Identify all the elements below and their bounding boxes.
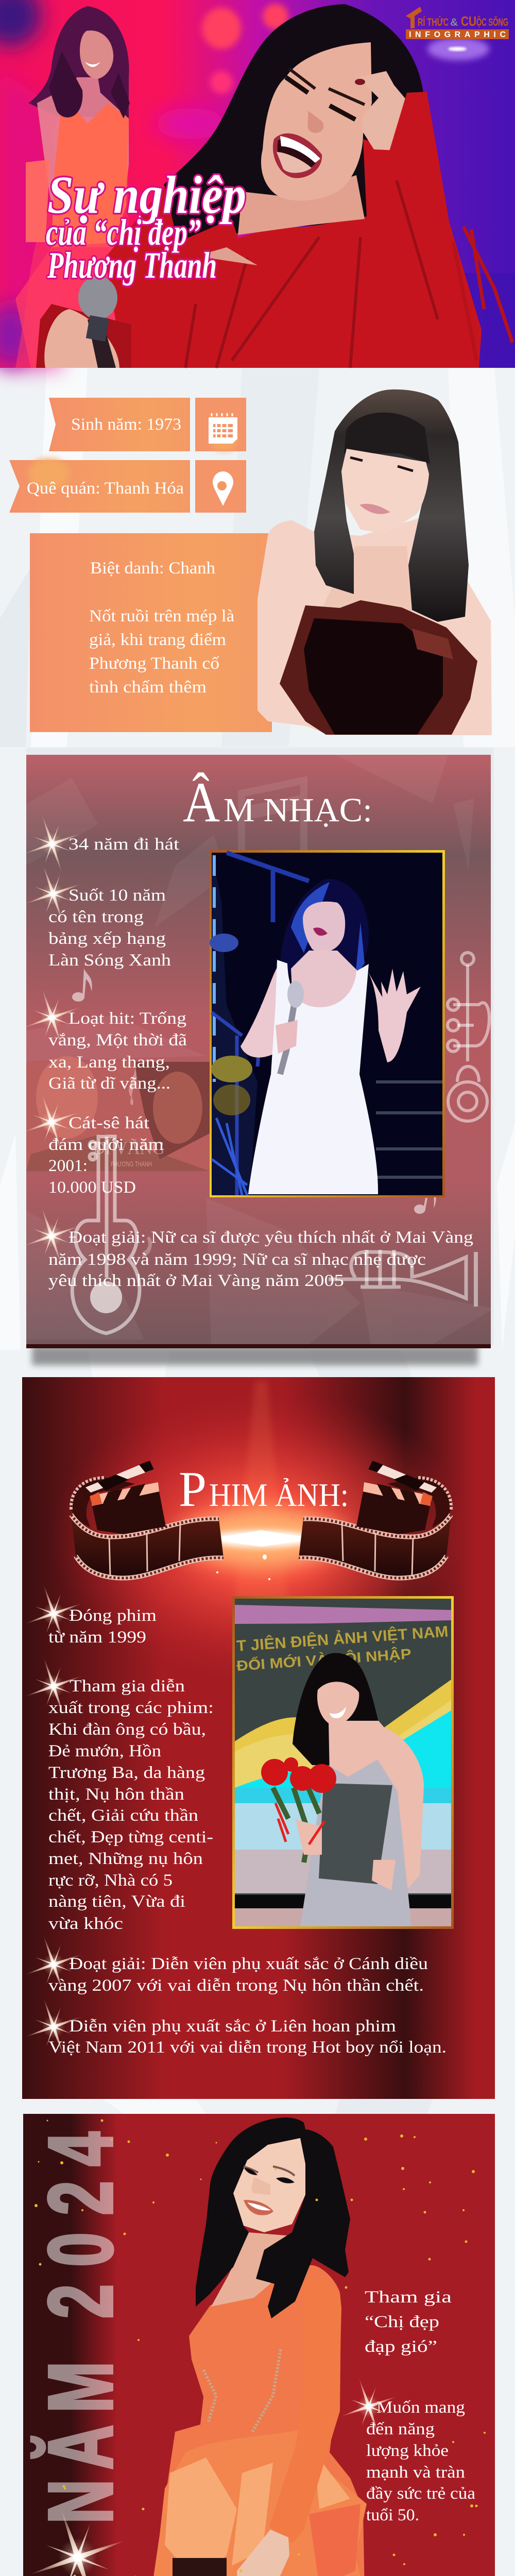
icon: location pin [195, 460, 246, 513]
text: music bullet list: Cát-sê hát [68, 1114, 149, 1132]
panel: music career [23, 748, 494, 1365]
heading: music [183, 771, 372, 834]
icon: sparkle bullets film [25, 1584, 82, 2057]
main figure: singer in red [36, 4, 512, 368]
icon: small music notes [72, 969, 436, 1257]
note panel: nickname and beauty mark: Biệt danh: Chanh [90, 559, 216, 578]
profile portrait [258, 389, 492, 735]
note panel: nickname and beauty mark: Phương Thanh cố [89, 654, 219, 673]
text: Tham gia Chị đẹp đạp gió: đạp gió” [365, 2337, 437, 2356]
album cover overlay [26, 1056, 210, 1171]
text: film bullet list: từ năm 1999 [48, 1628, 146, 1647]
music panel facets [26, 755, 494, 1344]
text: music bullet list: đám cưới năm [48, 1136, 164, 1154]
panel: film career [22, 1377, 495, 2099]
text: film bullet list: met, Những nụ hôn [48, 1850, 203, 1868]
panel: year 2024 [23, 2114, 495, 2576]
text: wish to bring energy: tuổi 50. [366, 2506, 419, 2524]
text: film bullet list: xuất trong các phim: [48, 1699, 214, 1717]
text: wish to bring energy: đến năng [366, 2420, 435, 2438]
text: film bullet list: rực rỡ, Nhà có 5 [48, 1871, 173, 1890]
text: film bullet list: vàng 2007 với vai diễn trong Nụ hôn thần chết. [48, 1976, 424, 1995]
icon: sparkle bullets music [23, 814, 82, 1266]
text: music bullet list: năm 1998 và năm 1999; Nữ ca sĩ nhạc nhẹ được [48, 1250, 426, 1269]
note panel: nickname and beauty mark: giả, khi trang điểm [89, 631, 226, 649]
logo: Tri thuc & Cuoc song infographic [406, 7, 509, 39]
text: music bullet list: Giã từ dĩ vãng... [48, 1074, 170, 1093]
vertical heading: year 2024: NĂM 2024 [30, 2132, 131, 2524]
profile: hometown tag: Quê quán: Thanh Hóa [27, 479, 184, 498]
note panel: nickname and beauty mark: Nốt ruồi trên mép là [89, 607, 234, 625]
title: Sự nghiệp của "chị đẹp" Phương Thanh [46, 165, 246, 286]
text: Tham gia Chị đẹp đạp gió [365, 2288, 452, 2356]
text: wish to bring energy [366, 2398, 475, 2524]
logo: Tri thuc & Cuoc song infographic: INFOGRAPHIC [409, 30, 506, 39]
profile: birth year tag: Sinh năm: 1973 [71, 415, 181, 434]
text: film bullet list: Việt Nam 2011 với vai diễn trong Hot boy nổi loạn. [48, 2038, 447, 2057]
icon: sparkles [29, 2377, 398, 2576]
text: wish to bring energy: đầy sức trẻ của [366, 2484, 475, 2503]
logo: Tri thuc & Cuoc song infographic: & [450, 16, 458, 28]
album cover overlay: DĨ VÃNG [93, 1138, 165, 1158]
singer hand holding microphone [36, 276, 131, 368]
title: Sự nghiệp của "chị đẹp" Phương Thanh: Sự nghiệp [47, 165, 246, 225]
text: Tham gia Chị đẹp đạp gió: Tham gia [365, 2288, 452, 2307]
icon: vertical trumpet [448, 953, 489, 1121]
heading: film: P [179, 1462, 207, 1517]
text: film bullet list: Diễn viên phụ xuất sắc ở Liên hoan phim [69, 2017, 396, 2036]
text: film bullet list [48, 1606, 447, 2057]
heading: music: Â [183, 771, 220, 834]
gold glitter dots [29, 2120, 486, 2576]
text: wish to bring energy: Muốn mang [376, 2398, 465, 2417]
text: music bullet list: có tên trong [48, 908, 144, 926]
photo: actress with flowers: ĐỔI MỚI VÀ HỘI NHẬP [236, 1645, 412, 1674]
text: music bullet list: yêu thích nhất ở Mai Vàng năm 2005 [48, 1272, 344, 1290]
text: music bullet list: vắng, Một thời đã [48, 1031, 187, 1049]
text: Tham gia Chị đẹp đạp gió: “Chị đẹp [365, 2313, 439, 2331]
film reel with clapperboard left [71, 1461, 224, 1578]
note panel: nickname and beauty mark: tình chấm thêm [89, 678, 207, 697]
header banner [0, 0, 515, 368]
film reel with clapperboard right [299, 1461, 451, 1578]
text: music bullet list [48, 835, 473, 1290]
title: Sự nghiệp của "chị đẹp" Phương Thanh: của “chị đẹp” [46, 212, 201, 253]
logo: Tri thuc & Cuoc song infographic: RÍ THỨC [418, 16, 449, 28]
text: film bullet list: Đoạt giải: Diễn viên phụ xuất sắc ở Cánh diều [69, 1955, 428, 1973]
profile: hometown tag [9, 459, 190, 513]
text: film bullet list: chết, Giải cứu thần [48, 1806, 198, 1825]
photo: actress with flowers [232, 1596, 454, 1929]
album cover overlay: PHƯƠNG THANH [111, 1160, 152, 1168]
icon: large music note [242, 781, 304, 850]
photo: singer in white on stage [210, 850, 445, 1197]
ghost figure: woman in orange dress [15, 6, 154, 368]
text: film bullet list: nàng tiên, Vừa đi [48, 1892, 185, 1911]
title: Sự nghiệp của "chị đẹp" Phương Thanh: Phương Thanh [47, 245, 217, 286]
text: film bullet list: chết, Đẹp từng centi- [48, 1828, 213, 1846]
text: film bullet list: Tham gia diễn [70, 1677, 185, 1696]
text: music bullet list: Làn Sóng Xanh [48, 951, 171, 970]
text: wish to bring energy: mạnh và tràn [366, 2463, 465, 2482]
header stage lights [0, 0, 515, 368]
text: film bullet list: thịt, Nụ hôn thần [48, 1785, 184, 1804]
figure: woman in orange dress [151, 2117, 367, 2576]
heading: music: M NHẠC: [224, 791, 372, 829]
heading: film: HIM ẢNH: [209, 1477, 349, 1513]
icon: calendar [195, 398, 246, 451]
icon: guitar [72, 1137, 140, 1333]
note panel: nickname and beauty mark [30, 533, 272, 732]
profile: birth year tag [49, 398, 190, 451]
text: music bullet list: 2001: [48, 1157, 88, 1175]
film glow [50, 1381, 472, 1687]
text: film bullet list: Đóng phim [69, 1606, 157, 1625]
icon: trumpet [329, 1250, 476, 1307]
singer raised hand [355, 71, 512, 361]
text: wish to bring energy: lượng khỏe [366, 2442, 449, 2460]
text: music bullet list: Loạt hit: Trống [68, 1009, 186, 1028]
text: music bullet list: bảng xếp hạng [48, 929, 166, 948]
heading: film [179, 1462, 349, 1517]
singer open mouth [273, 133, 322, 178]
text: music bullet list: Đoạt giải: Nữ ca sĩ được yêu thích nhất ở Mai Vàng [68, 1228, 473, 1247]
text: music bullet list: 10.000 USD [48, 1178, 136, 1197]
text: music bullet list: xa, Lang thang, [48, 1053, 170, 1072]
text: film bullet list: Đẻ mướn, Hồn [48, 1742, 161, 1760]
text: music bullet list: 34 năm đi hát [68, 835, 179, 854]
text: film bullet list: Trương Ba, da hàng [48, 1764, 205, 1782]
text: music bullet list: Suốt 10 năm [68, 886, 166, 905]
photo: actress with flowers: T JIÊN ĐIỆN ẢNH VIỆT NAM [236, 1622, 449, 1655]
logo: Tri thuc & Cuoc song infographic: CU [461, 13, 476, 29]
text: film bullet list: vừa khóc [48, 1914, 123, 1933]
text: film bullet list: Khi đàn ông có bầu, [48, 1720, 206, 1739]
